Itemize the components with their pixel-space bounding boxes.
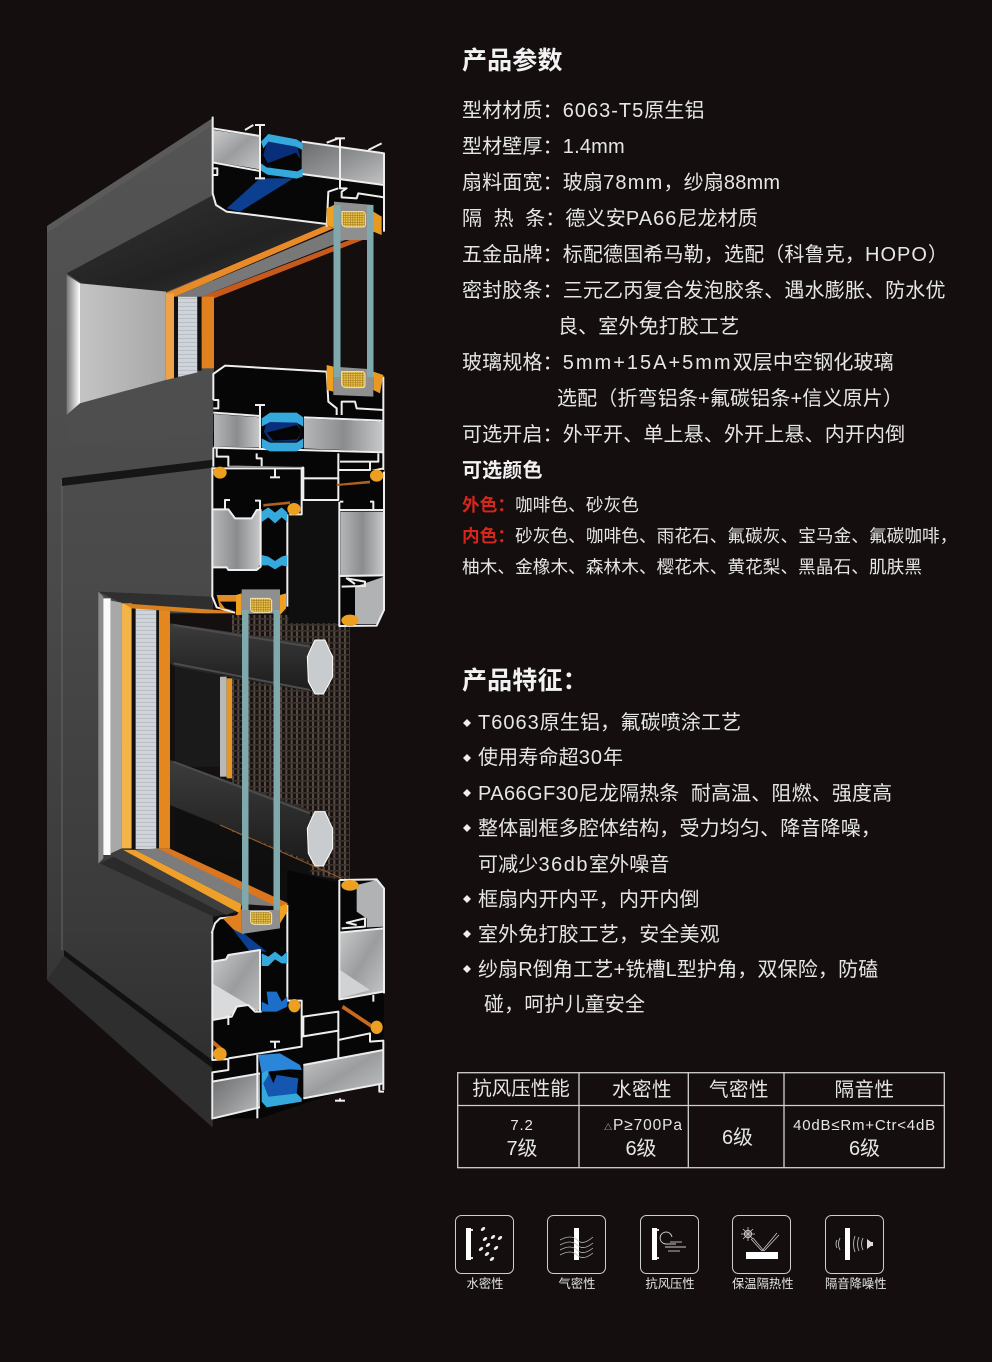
feature list: 框扇内开内平，内开内倒 <box>478 889 700 911</box>
lower double glazing panes <box>242 610 280 910</box>
parameter list: 五金品牌：标配德国希马勒，选配（科鲁克，HOPO） <box>462 244 948 266</box>
screen sash mid profile <box>212 462 384 626</box>
feature list: 可减少36db室外噪音 <box>478 854 670 876</box>
performance table: 水密性 <box>612 1079 672 1101</box>
feature list: 碰，呵护儿童安全 <box>484 994 645 1016</box>
facade wall <box>47 118 227 1127</box>
lower sill band <box>100 825 342 917</box>
icon: thermal insulation: 保温隔热性 <box>732 1277 794 1291</box>
icon: wind pressure <box>640 1215 699 1291</box>
feature list: 室外免打胶工艺，安全美观 <box>478 924 720 946</box>
icon: thermal insulation <box>732 1215 794 1291</box>
parameter list <box>462 100 957 577</box>
feature list: 纱扇R倒角工艺+铣槽L型护角，双保险，防磕 <box>478 959 878 981</box>
parameter list: 型材材质：6063-T5原生铝 <box>462 100 705 122</box>
parameter list: 隔 热 条：德义安PA66尼龙材质 <box>462 208 758 230</box>
parameter list: 可选开启：外平开、单上悬、外开上悬、内开内倒 <box>462 424 905 446</box>
performance table: △P≥700Pa <box>604 1117 683 1134</box>
icon: sound insulation <box>825 1215 886 1291</box>
performance table: 7.2 <box>510 1117 534 1134</box>
feature list: 整体副框多腔体结构，受力均匀、降音降噪， <box>478 818 881 840</box>
icon: water tightness: 水密性 <box>467 1277 503 1291</box>
icon: wind pressure: 抗风压性 <box>645 1277 695 1291</box>
parameter list: 密封胶条：三元乙丙复合发泡胶条、遇水膨胀、防水优 <box>462 280 946 302</box>
parameter list: 柚木、金橡木、森林木、樱花木、黄花梨、黑晶石、肌肤黑 <box>462 557 922 577</box>
parameter list: 型材壁厚：1.4mm <box>462 136 625 158</box>
performance table: 抗风压性能 <box>472 1078 570 1100</box>
lower sash and frame profile <box>212 870 384 1119</box>
feature list: T6063原生铝，氟碳喷涂工艺 <box>478 712 741 734</box>
parameter list: 良、室外免打胶工艺 <box>558 316 739 338</box>
heading: product parameters: 产品参数 <box>462 47 563 75</box>
performance table: 6级 <box>625 1138 657 1160</box>
performance table: 40dB≤Rm+Ctr<4dB <box>793 1117 936 1134</box>
upper frame profile <box>213 117 384 240</box>
feature list: 使用寿命超30年 <box>478 747 623 769</box>
performance table <box>457 1072 945 1168</box>
lower window opening with insect screen <box>98 592 350 882</box>
performance table: 隔音性 <box>834 1079 894 1101</box>
icon: sound insulation: 隔音降噪性 <box>825 1277 886 1291</box>
icon: air tightness: 气密性 <box>559 1277 595 1291</box>
upper double glazing panes <box>334 205 374 377</box>
parameter list: 扇料面宽：玻扇78mm，纱扇88mm <box>462 172 780 194</box>
performance table: 7级 <box>506 1138 538 1160</box>
performance table: 气密性 <box>709 1079 769 1101</box>
middle frame and sash profile <box>213 366 383 517</box>
parameter list: 可选颜色 <box>462 460 543 482</box>
performance table: 6级 <box>722 1127 753 1149</box>
performance table: 6级 <box>849 1138 880 1160</box>
parameter list: 外色：咖啡色、砂灰色 <box>462 495 639 515</box>
feature list: PA66GF30尼龙隔热条 耐高温、阻燃、强度高 <box>478 783 892 805</box>
parameter list: 选配（折弯铝条+氟碳铝条+信义原片） <box>557 388 903 410</box>
parameter list: 内色：砂灰色、咖啡色、雨花石、氟碳灰、宝马金、氟碳咖啡， <box>462 526 957 546</box>
heading: product features: 产品特征： <box>462 667 588 695</box>
parameter list: 玻璃规格：5mm+15A+5mm双层中空钢化玻璃 <box>462 352 894 374</box>
icon: water tightness <box>455 1215 514 1291</box>
icon: air tightness <box>547 1215 606 1291</box>
upper window opening <box>67 195 367 447</box>
feature list <box>463 712 892 1016</box>
